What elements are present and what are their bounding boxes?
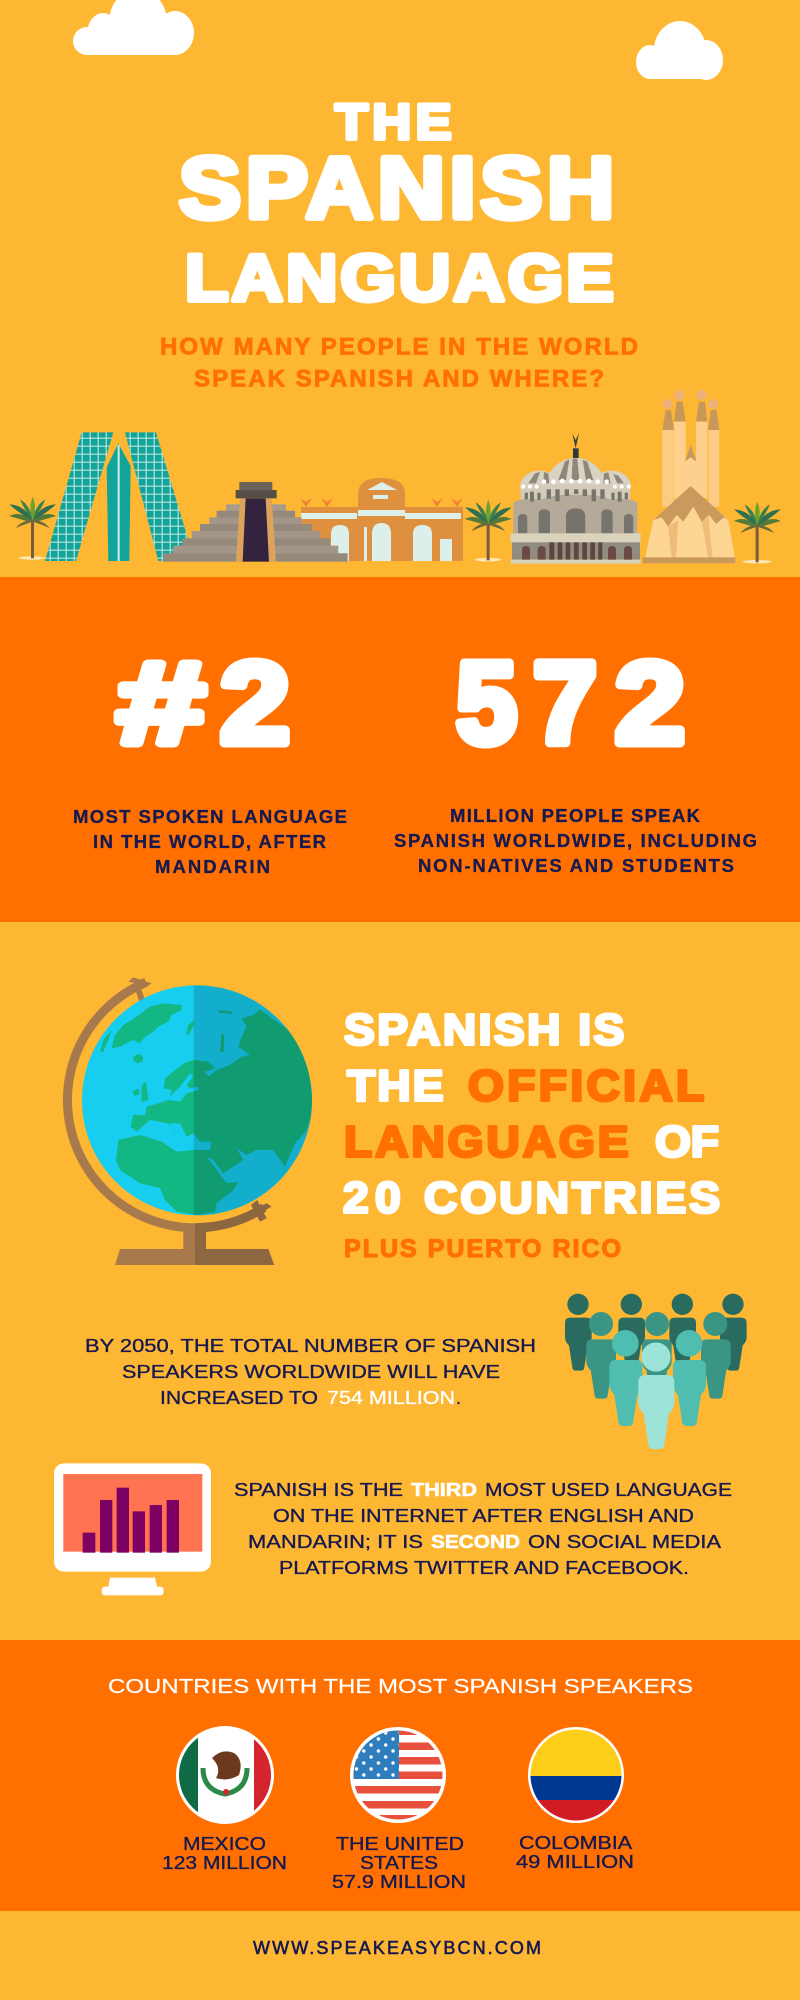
- label: United States: 57.9 MILLION: [332, 1872, 466, 1892]
- text block: internet usage: [234, 1480, 732, 1578]
- icon: cloud left: [73, 0, 194, 55]
- heading: official language: OFFICIAL: [468, 1061, 704, 1110]
- flag: United States: [350, 1727, 446, 1823]
- text block: 2050 forecast: 754 MILLION: [327, 1388, 455, 1408]
- building: basilica: [643, 390, 735, 563]
- text block: 2050 forecast: INCREASED TO: [160, 1388, 318, 1408]
- label: Mexico: [162, 1834, 287, 1873]
- title: SPANISH: [179, 140, 614, 236]
- label: United States: [332, 1834, 466, 1892]
- label: Colombia: 49 MILLION: [516, 1852, 634, 1872]
- stat: 572: 5: [456, 638, 517, 768]
- heading: official language: COUNTRIES: [424, 1173, 720, 1222]
- text block: 2050 forecast: BY 2050, THE TOTAL NUMBER OF SPANISH: [85, 1336, 536, 1356]
- building: pyramid: [163, 482, 348, 562]
- heading: official language: LANGUAGE: [344, 1117, 629, 1166]
- text block: internet usage: MANDARIN; IT IS: [248, 1532, 423, 1552]
- text block: internet usage: MOST USED LANGUAGE: [485, 1480, 732, 1500]
- label: United States: THE UNITED: [336, 1834, 464, 1854]
- icon: palm tree left: [9, 497, 56, 560]
- heading: official language: OF: [655, 1117, 719, 1166]
- title: THE: [335, 95, 452, 151]
- caption: million people: [394, 805, 757, 876]
- label: Mexico: 123 MILLION: [162, 1853, 287, 1873]
- stat: number two: 2: [220, 638, 290, 768]
- flag: Mexico: [175, 1725, 279, 1825]
- caption: most spoken language: IN THE WORLD, AFTER: [93, 831, 326, 852]
- stat: number two: [117, 638, 290, 768]
- caption: million people: SPANISH WORLDWIDE, INCLUDING: [394, 830, 757, 851]
- subheading: plus puerto rico: PLUS PUERTO RICO: [344, 1235, 621, 1263]
- heading: official language: SPANISH IS: [344, 1005, 624, 1054]
- footer website: WWW.SPEAKEASYBCN.COM: [253, 1938, 541, 1958]
- text block: 2050 forecast: .: [456, 1388, 461, 1408]
- label: Colombia: [516, 1833, 634, 1872]
- stat: 572: [456, 638, 685, 768]
- flag: Colombia: [528, 1727, 624, 1824]
- title: LANGUAGE: [185, 241, 614, 315]
- icon: cloud right: [636, 21, 723, 80]
- stat: 572: 7: [533, 638, 597, 768]
- text block: internet usage: SECOND: [431, 1532, 520, 1552]
- heading: official language: THE: [347, 1061, 444, 1110]
- panel: countries with the most speakers: [0, 1640, 800, 1911]
- title: [179, 95, 614, 315]
- panel heading: COUNTRIES WITH THE MOST SPANISH SPEAKERS: [108, 1676, 693, 1698]
- heading: official language: 20: [343, 1173, 401, 1222]
- text block: 2050 forecast: [85, 1336, 536, 1408]
- subtitle: [160, 334, 638, 392]
- panel: key numbers: [0, 577, 800, 922]
- text block: internet usage: PLATFORMS TWITTER AND FACEBOOK.: [279, 1558, 689, 1578]
- caption: most spoken language: [73, 806, 347, 877]
- text block: 2050 forecast: SPEAKERS WORLDWIDE WILL HAVE: [122, 1362, 500, 1382]
- icon: palm tree middle: [465, 500, 512, 561]
- building: domed palace: [511, 433, 641, 564]
- heading: official language: [343, 1005, 720, 1263]
- icon: globe: [67, 977, 317, 1265]
- icon: group of people: [565, 1294, 747, 1449]
- caption: most spoken language: MANDARIN: [155, 856, 270, 877]
- subtitle: SPEAK SPANISH AND WHERE?: [194, 366, 604, 392]
- text block: internet usage: SPANISH IS THE: [234, 1480, 403, 1500]
- building: palace: [300, 478, 463, 561]
- text block: internet usage: ON SOCIAL MEDIA: [528, 1532, 721, 1552]
- caption: most spoken language: MOST SPOKEN LANGUAGE: [73, 806, 347, 827]
- label: United States: STATES: [360, 1853, 438, 1873]
- caption: million people: NON-NATIVES AND STUDENTS: [418, 855, 734, 876]
- icon: monitor bar chart: [54, 1463, 211, 1595]
- caption: million people: MILLION PEOPLE SPEAK: [450, 805, 701, 826]
- label: Mexico: MEXICO: [183, 1834, 266, 1854]
- subtitle: HOW MANY PEOPLE IN THE WORLD: [160, 334, 638, 360]
- text block: internet usage: ON THE INTERNET AFTER ENGLISH AND: [273, 1506, 694, 1526]
- text block: internet usage: THIRD: [411, 1480, 477, 1500]
- stat: number two: #: [117, 638, 205, 768]
- building: twin leaning towers: [45, 432, 188, 561]
- label: Colombia: COLOMBIA: [519, 1833, 632, 1853]
- icon: palm tree right: [734, 502, 781, 563]
- skyline illustration: [9, 390, 781, 564]
- stat: 572: 2: [615, 638, 685, 768]
